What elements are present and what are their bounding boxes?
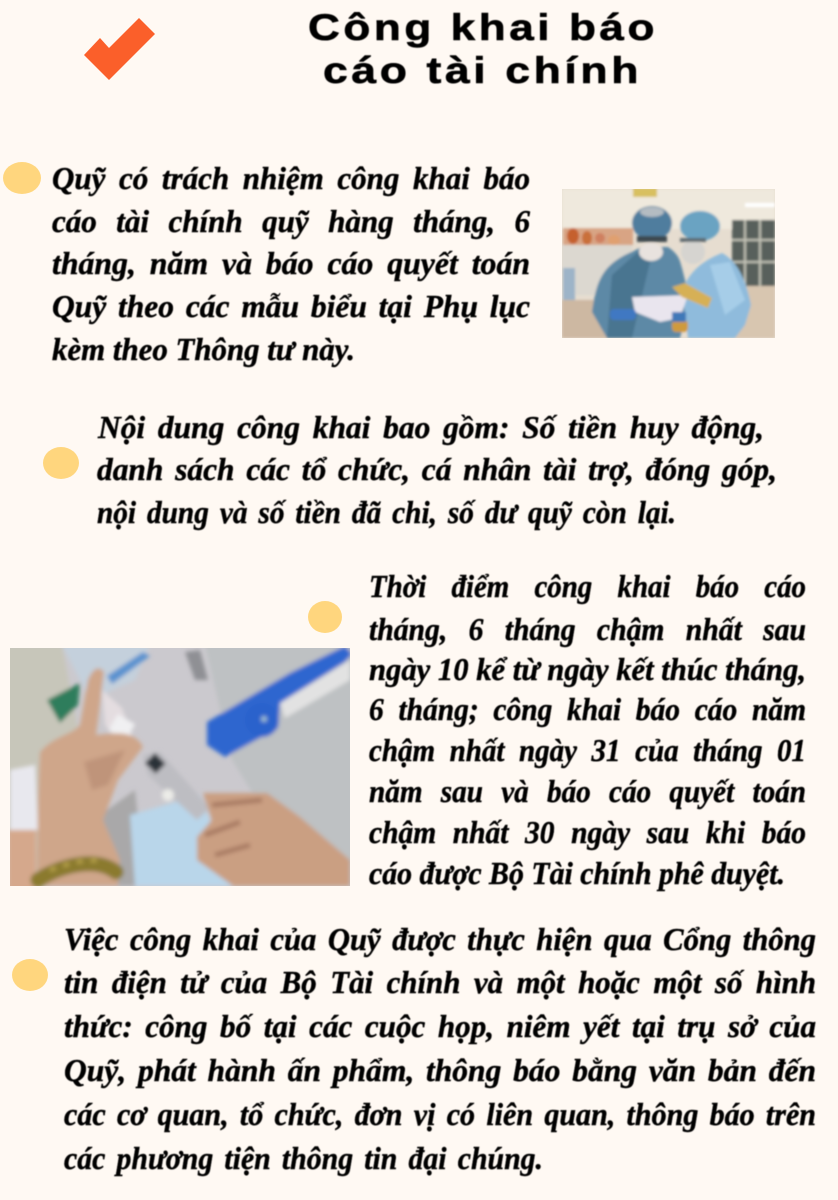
text block 3 xyxy=(369,568,806,891)
text block 1: kèm theo Thông tư này. xyxy=(52,331,355,367)
text block 3: chậm nhất 30 ngày sau khi báo xyxy=(369,814,806,850)
icon: orange check mark xyxy=(84,18,155,80)
text block 1: Quỹ có trách nhiệm công khai báo xyxy=(52,160,530,196)
text block 4: thức: công bố tại các cuộc họp, niêm yết tại trụ sở của xyxy=(64,1008,816,1044)
text block 2: nội dung và số tiền đã chi, số dư quỹ còn lại. xyxy=(97,494,676,530)
photo: hands preparing a vaccine syringe xyxy=(5,645,355,890)
photo: two medical workers reading a document xyxy=(562,188,775,338)
text block 4: Quỹ, phát hành ấn phẩm, thông báo bằng văn bản đến xyxy=(64,1052,816,1088)
text block 3: ngày 10 kể từ ngày kết thúc tháng, xyxy=(369,651,806,687)
text block 2 xyxy=(97,409,777,530)
text block 1: tháng, năm và báo cáo quyết toán xyxy=(52,245,530,281)
title: Công khai báo xyxy=(308,7,658,48)
text block 4: các phương tiện thông tin đại chúng. xyxy=(64,1140,543,1176)
text block 4: tin điện tử của Bộ Tài chính và một hoặc một số hình xyxy=(64,964,816,1000)
text block 4 xyxy=(64,921,816,1176)
text block 3: tháng, 6 tháng chậm nhất sau xyxy=(369,611,806,647)
bullet dot 3 xyxy=(308,601,342,633)
text block 2: Nội dung công khai bao gồm: Số tiền huy động, xyxy=(97,409,764,445)
bullet dot 1 xyxy=(3,162,41,194)
bullet dot 2 xyxy=(43,447,79,479)
title xyxy=(308,7,658,91)
text block 2: danh sách các tổ chức, cá nhân tài trợ, đóng góp, xyxy=(97,451,777,487)
text block 3: cáo được Bộ Tài chính phê duyệt. xyxy=(369,855,785,891)
text block 4: Việc công khai của Quỹ được thực hiện qua Cổng thông xyxy=(64,921,816,957)
bullet dot 4 xyxy=(12,959,48,991)
text block 1: Quỹ theo các mẫu biểu tại Phụ lục xyxy=(52,288,530,324)
text block 1: cáo tài chính quỹ hàng tháng, 6 xyxy=(52,203,530,239)
text block 1 xyxy=(52,160,530,367)
text block 3: 6 tháng; công khai báo cáo năm xyxy=(369,691,806,727)
text block 3: năm sau và báo cáo quyết toán xyxy=(369,773,806,809)
title: cáo tài chính xyxy=(323,50,642,91)
text block 3: chậm nhất ngày 31 của tháng 01 xyxy=(369,732,806,768)
